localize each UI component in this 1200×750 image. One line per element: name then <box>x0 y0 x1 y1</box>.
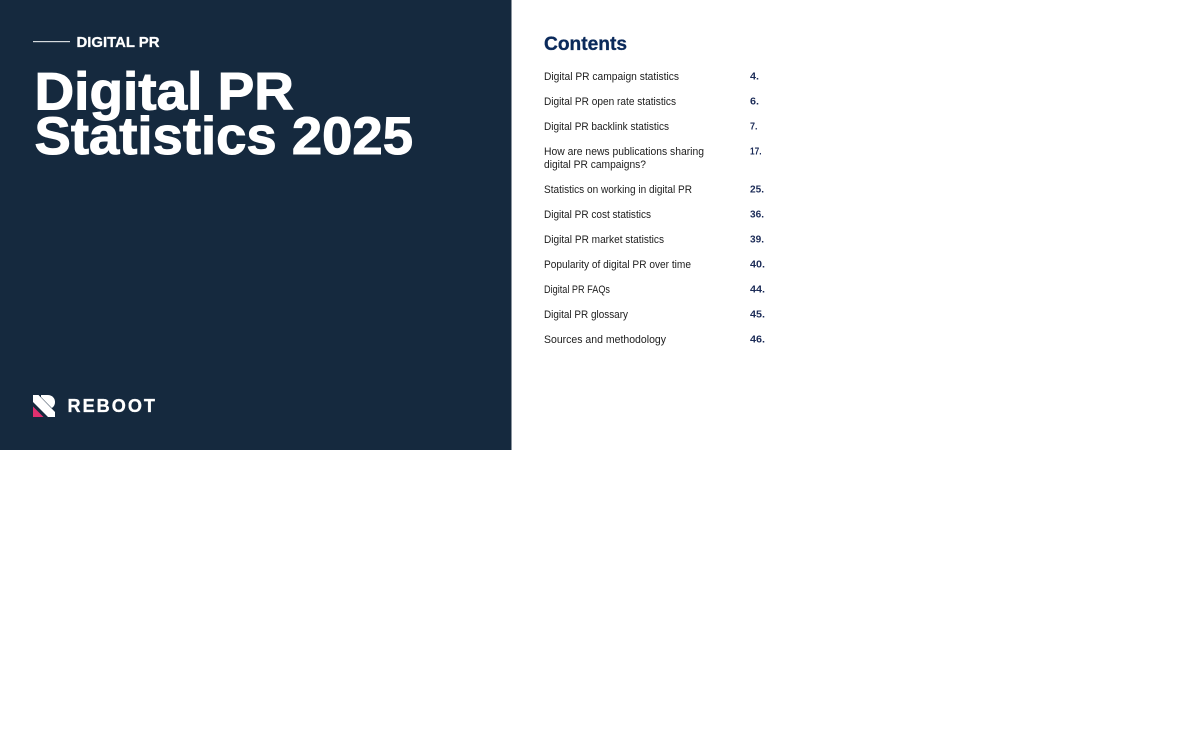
contents entry: cost statistics: Digital PR cost statistics <box>544 209 651 221</box>
contents entry: open rate statistics: 6. <box>750 96 759 108</box>
contents entry: campaign statistics <box>544 70 759 83</box>
heading: Contents: Contents <box>544 34 627 55</box>
section label: Digital PR <box>33 34 160 51</box>
contents entry: popularity over time: Popularity of digital PR over time <box>544 259 691 271</box>
icon: Reboot mark <box>33 395 55 417</box>
contents entry: glossary <box>544 308 765 321</box>
contents entry: FAQs: Digital PR FAQs <box>544 284 610 296</box>
contents entry: glossary: Digital PR glossary <box>544 309 628 321</box>
contents entry: sources and methodology <box>544 334 765 346</box>
section label: Digital PR: DIGITAL PR <box>76 34 160 51</box>
logo: Reboot <box>33 395 157 417</box>
contents entry: glossary: 45. <box>750 308 765 320</box>
contents entry: open rate statistics: Digital PR open rate statistics <box>544 96 676 108</box>
contents entry: market statistics: Digital PR market statistics <box>544 234 664 246</box>
contents entry: popularity over time <box>544 258 765 271</box>
title: Statistics 2025 <box>34 107 413 166</box>
contents entry: campaign statistics: 4. <box>750 70 759 82</box>
contents entry: open rate statistics <box>544 96 759 108</box>
contents entry: sources and methodology: 46. <box>750 334 765 346</box>
contents entry: working in digital PR: Statistics on working in digital PR <box>544 184 692 196</box>
contents entry: news publications: 17. <box>750 146 762 158</box>
contents entry: cost statistics: 36. <box>750 208 764 220</box>
contents entry: news publications <box>544 146 762 171</box>
title: Digital PR <box>34 62 294 122</box>
contents entry: campaign statistics: Digital PR campaign statistics <box>544 71 679 83</box>
contents entry: cost statistics <box>544 208 764 221</box>
contents entry: market statistics: 39. <box>750 234 764 246</box>
contents entry: popularity over time: 40. <box>750 258 765 270</box>
contents entry: news publications: digital PR campaigns? <box>544 159 646 171</box>
title <box>34 62 413 166</box>
panel: cover <box>0 0 512 450</box>
contents entry: market statistics <box>544 234 764 246</box>
contents entry: sources and methodology: Sources and methodology <box>544 334 666 346</box>
contents entry: backlink statistics: Digital PR backlink statistics <box>544 121 669 133</box>
contents entry: news publications: How are news publications sharing <box>544 146 704 158</box>
contents entry: working in digital PR: 25. <box>750 184 764 196</box>
contents entry: backlink statistics: 7. <box>750 120 758 132</box>
contents entry: FAQs <box>544 284 765 296</box>
panel: contents <box>544 34 765 346</box>
contents entry: backlink statistics <box>544 120 758 133</box>
logo: Reboot: REBOOT <box>68 396 157 416</box>
contents entry: FAQs: 44. <box>750 284 765 296</box>
